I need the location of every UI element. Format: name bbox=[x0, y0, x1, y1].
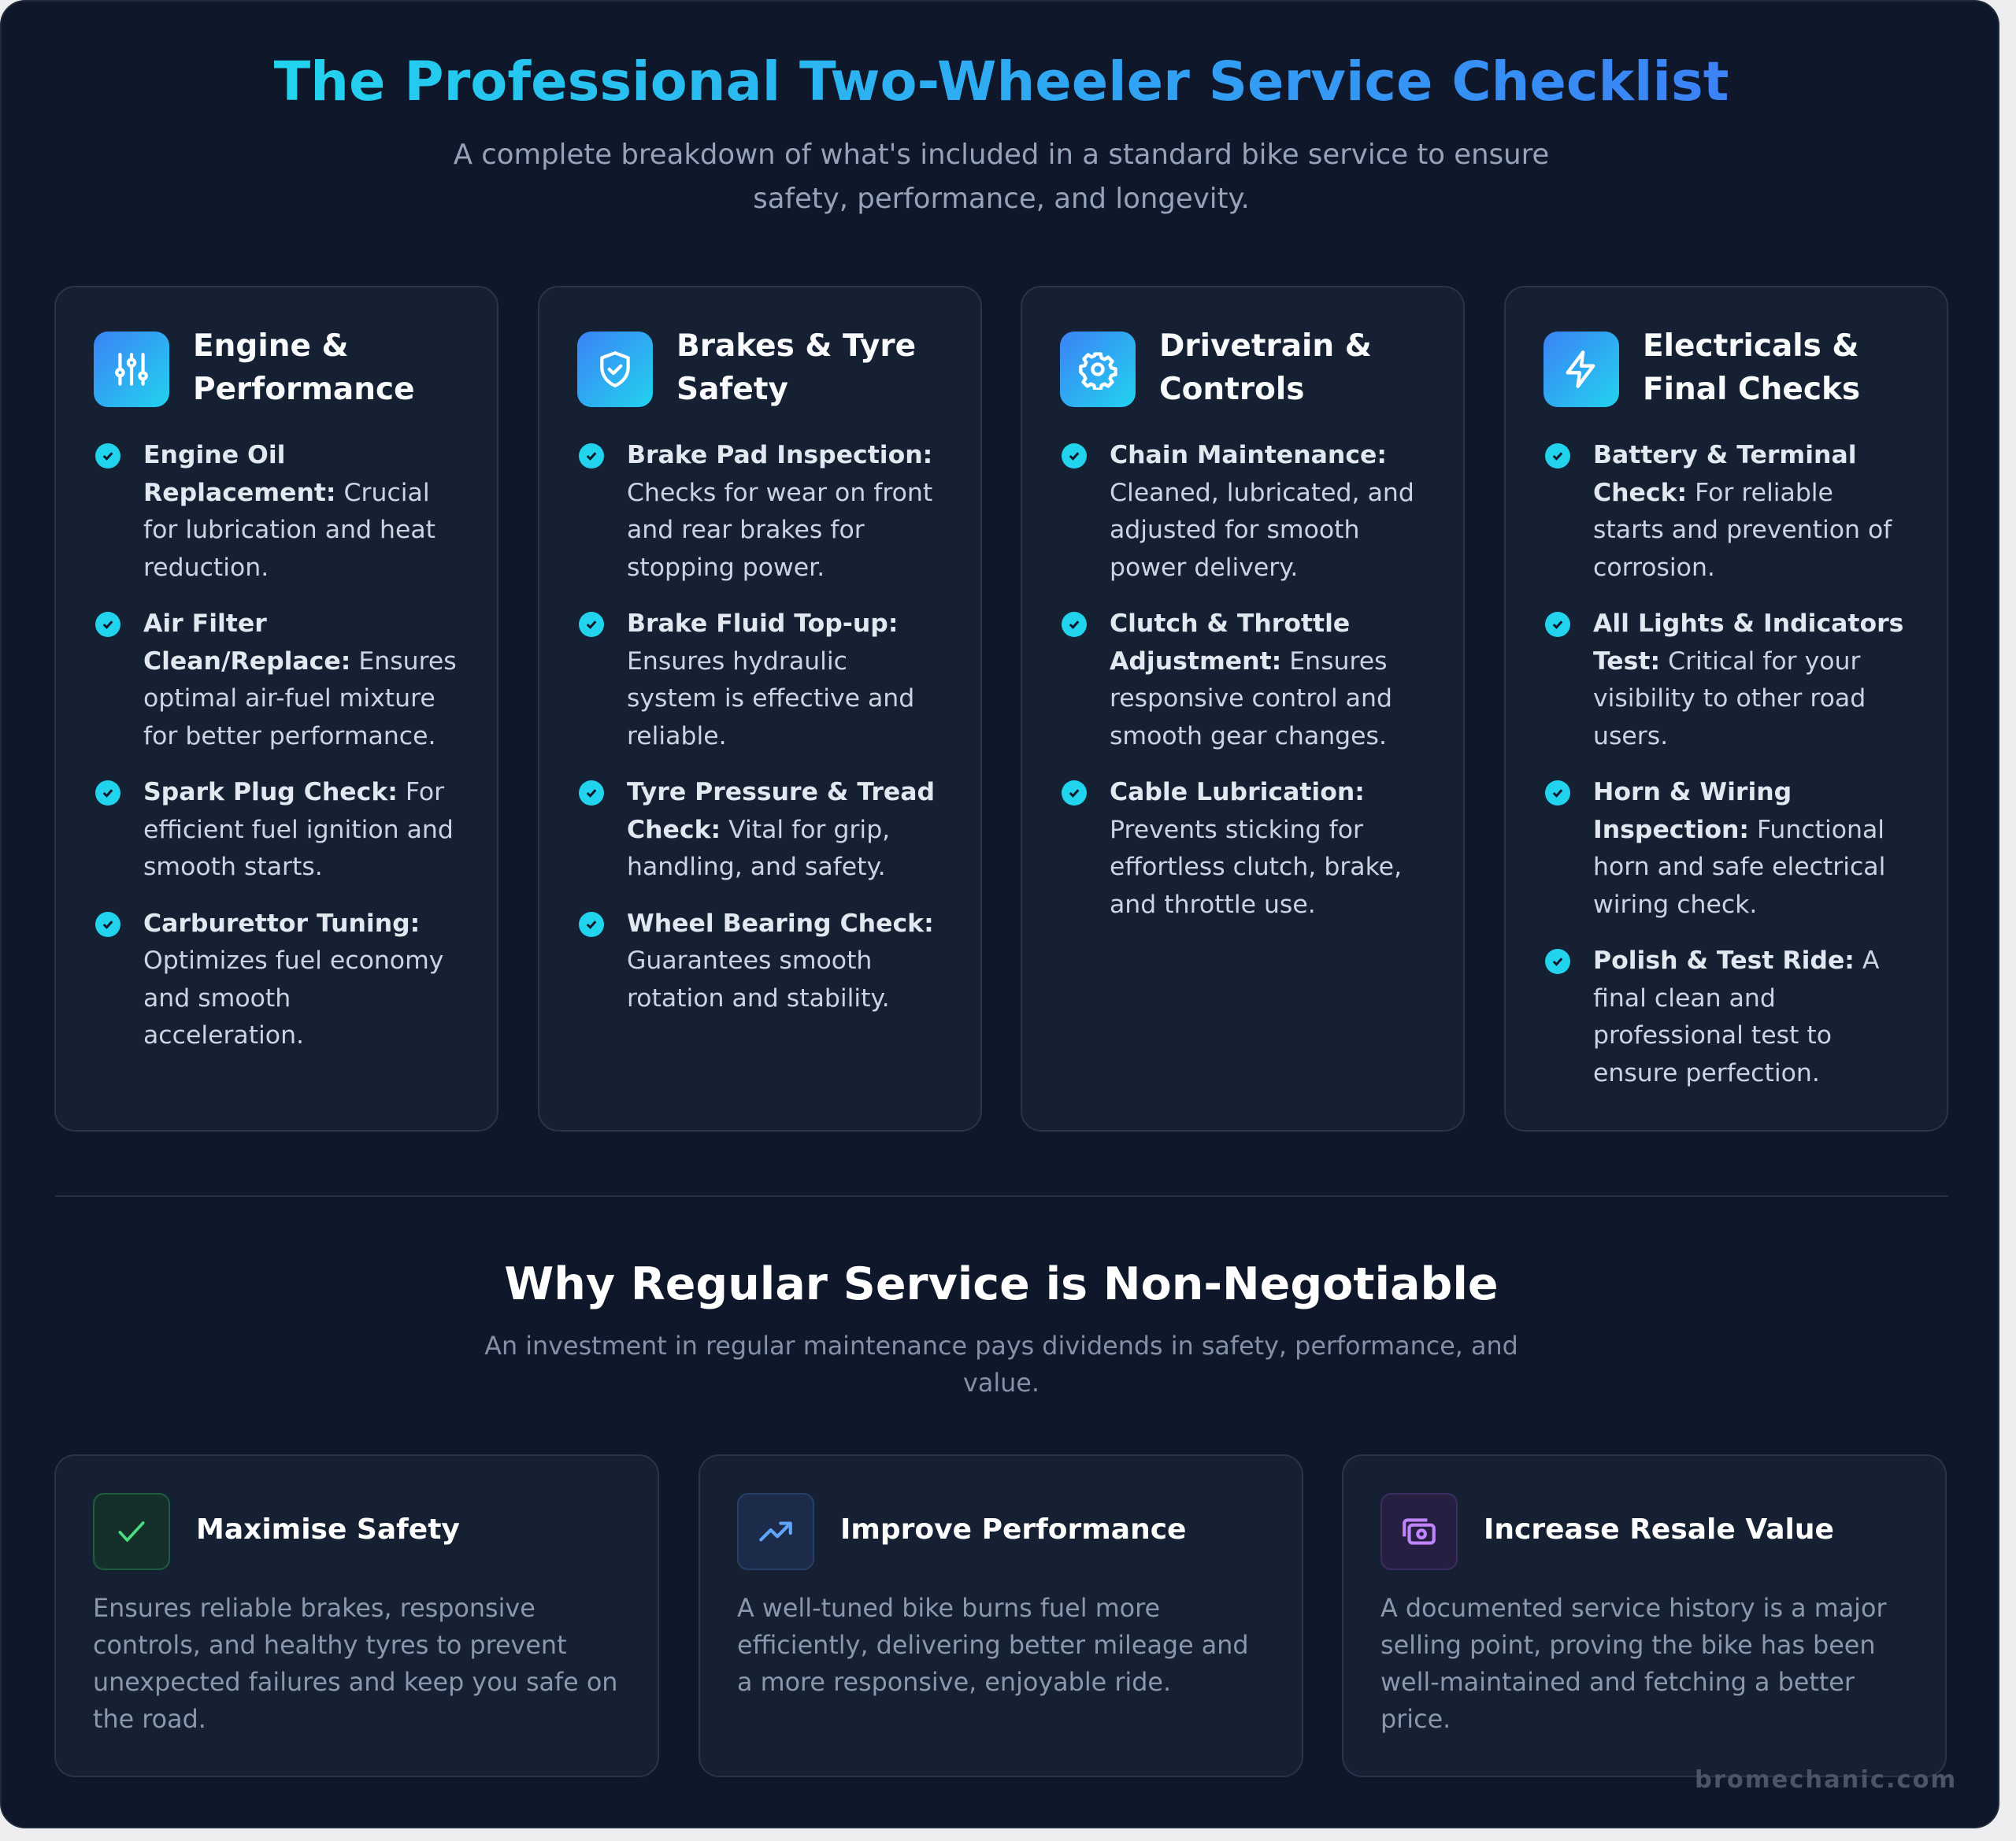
panel: maximise safety bbox=[54, 1454, 659, 1777]
heading: Final Checks bbox=[1643, 372, 1860, 407]
checklist items: Wheel Bearing Check: Guarantees smooth rotation and stability. bbox=[627, 909, 934, 1013]
heading: Engine & bbox=[193, 328, 348, 364]
heading: Safety bbox=[676, 372, 788, 407]
checklist items: Polish & Test Ride: A final clean and professional test to ensure perfection. bbox=[1593, 946, 1879, 1087]
heading: Drivetrain & bbox=[1159, 328, 1372, 364]
section subtitle bbox=[484, 1332, 1518, 1398]
checklist items: Clutch & Throttle Adjustment: Ensures responsive control and smooth gear changes. bbox=[1110, 609, 1392, 750]
panel: improve performance bbox=[699, 1454, 1303, 1777]
checklist items bbox=[1062, 441, 1414, 918]
panel: engine & performance bbox=[54, 286, 498, 1132]
checklist items: Brake Fluid Top-up: Ensures hydraulic system is effective and reliable. bbox=[627, 609, 914, 750]
card text: A well-tuned bike burns fuel more efficiently, delivering better mileage and a more responsive, enjoyable ride. bbox=[737, 1594, 1249, 1697]
heading: Performance bbox=[193, 372, 415, 407]
heading bbox=[676, 328, 916, 407]
subtitle bbox=[454, 139, 1549, 215]
panel: electricals & final checks bbox=[1504, 286, 1948, 1132]
heading bbox=[1159, 328, 1372, 407]
icon: trending up bbox=[737, 1493, 814, 1570]
watermark: bromechanic.com bbox=[1695, 1766, 1957, 1794]
icon: sliders bbox=[94, 332, 169, 407]
icon: gear bbox=[1060, 332, 1136, 407]
heading: Controls bbox=[1159, 372, 1304, 407]
heading bbox=[193, 328, 415, 407]
heading bbox=[1643, 328, 1860, 407]
checklist items: Chain Maintenance: Cleaned, lubricated, and adjusted for smooth power delivery. bbox=[1110, 441, 1414, 581]
card text: Ensures reliable brakes, responsive controls, and healthy tyres to prevent unexpected failures and keep you safe on the road. bbox=[93, 1594, 617, 1734]
panel: drivetrain & controls bbox=[1021, 286, 1465, 1132]
checklist items bbox=[1545, 441, 1903, 1087]
checklist items: Tyre Pressure & Tread Check: Vital for grip, handling, and safety. bbox=[627, 778, 935, 881]
subtitle: A complete breakdown of what's included in a standard bike service to ensure bbox=[454, 139, 1549, 171]
checklist items: Engine Oil Replacement: Crucial for lubrication and heat reduction. bbox=[143, 441, 435, 581]
checklist items: Brake Pad Inspection: Checks for wear on front and rear brakes for stopping power. bbox=[627, 441, 932, 581]
card title: Increase Resale Value bbox=[1484, 1513, 1834, 1546]
icon: check bbox=[93, 1493, 170, 1570]
checklist items: Battery & Terminal Check: For reliable starts and prevention of corrosion. bbox=[1593, 441, 1892, 581]
checklist items bbox=[579, 441, 935, 1013]
checklist items: All Lights & Indicators Test: Critical for your visibility to other road users. bbox=[1593, 609, 1903, 750]
checklist items: Cable Lubrication: Prevents sticking for effortless clutch, brake, and throttle use. bbox=[1110, 778, 1402, 918]
card title: Improve Performance bbox=[840, 1513, 1186, 1546]
section subtitle: An investment in regular maintenance pays dividends in safety, performance, and bbox=[484, 1332, 1518, 1361]
card title: Maximise Safety bbox=[196, 1513, 460, 1546]
subtitle: safety, performance, and longevity. bbox=[753, 183, 1250, 215]
title: The Professional Two-Wheeler Service Checklist bbox=[274, 50, 1729, 113]
section subtitle: value. bbox=[963, 1369, 1040, 1398]
icon: lightning bbox=[1544, 332, 1619, 407]
checklist items bbox=[95, 441, 457, 1050]
icon: money bbox=[1380, 1493, 1458, 1570]
panel: increase resale value bbox=[1342, 1454, 1947, 1777]
section heading: Why Regular Service is Non-Negotiable bbox=[504, 1258, 1499, 1310]
checklist items: Horn & Wiring Inspection: Functional horn and safe electrical wiring check. bbox=[1593, 778, 1885, 918]
heading: Brakes & Tyre bbox=[676, 328, 916, 364]
checklist items: Air Filter Clean/Replace: Ensures optimal air-fuel mixture for better performance. bbox=[143, 609, 457, 750]
heading: Electricals & bbox=[1643, 328, 1858, 364]
checklist items: Spark Plug Check: For efficient fuel ignition and smooth starts. bbox=[143, 778, 454, 881]
icon: shield bbox=[577, 332, 653, 407]
card text: A documented service history is a major selling point, proving the bike has been well-maintained and fetching a better price. bbox=[1380, 1594, 1887, 1734]
panel: brakes & tyre safety bbox=[538, 286, 982, 1132]
checklist items: Carburettor Tuning: Optimizes fuel economy and smooth acceleration. bbox=[143, 909, 443, 1050]
